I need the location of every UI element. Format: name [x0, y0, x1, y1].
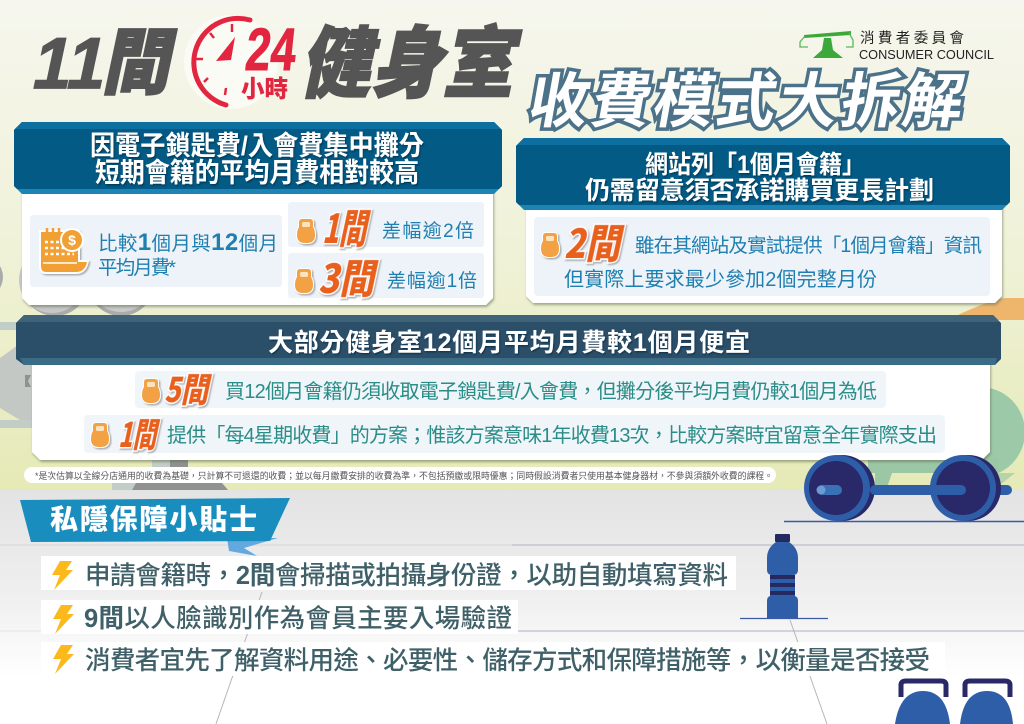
panel heading line 1: 網站列「1個月會籍」	[645, 151, 865, 179]
tip text: 消費者宜先了解資料用途、必要性、儲存方式和保障措施等，以衡量是否接受	[85, 647, 930, 675]
row text: 買12個月會籍仍須收取電子鎖匙費/入會費，但攤分後平均月費仍較1個月為低	[225, 380, 877, 403]
panel heading line 1: 因電子鎖匙費/入會費集中攤分	[90, 131, 424, 161]
comparison text line 2: 平均月費*	[98, 257, 176, 279]
result text: 差幅逾1倍	[387, 270, 477, 292]
icon: kettlebell	[541, 233, 559, 257]
panel: one-month membership	[516, 138, 1010, 303]
icon: kettlebell	[91, 423, 109, 447]
banner title: 私隱保障小貼士	[50, 503, 257, 535]
inner box	[534, 217, 990, 296]
icon: kettlebell	[297, 219, 315, 243]
floor lines	[0, 545, 1024, 724]
icon: kettlebells	[895, 681, 1013, 724]
title part: 24: 24	[243, 16, 300, 83]
count: 1間: 1間	[116, 407, 164, 457]
icon: water bottle	[740, 534, 828, 618]
logo: Consumer Council	[800, 30, 994, 62]
panel body	[526, 205, 1002, 303]
count: 5間: 5間	[162, 362, 216, 412]
panel body	[22, 190, 493, 305]
banner fold	[227, 538, 278, 556]
icon: lightning bolt	[53, 605, 74, 634]
icon: barbell	[784, 455, 1024, 522]
logo scale icon	[800, 31, 853, 58]
title part: 小時: 小時	[241, 76, 288, 103]
logo Chinese name: 消費者委員會	[860, 30, 964, 47]
subtitle: 收費模式大拆解: 收費模式大拆解	[524, 67, 970, 135]
count: 1間: 1間	[319, 197, 376, 255]
title part: 11間: 11間	[27, 24, 183, 104]
clock icon	[184, 15, 278, 109]
panel header	[14, 122, 502, 194]
panel: short-term membership fees	[14, 122, 502, 305]
title part: 健身室: 健身室	[296, 21, 528, 108]
footnote: *是次估算以全線分店通用的收費為基礎，只計算不可退還的收費；並以每月繳費安排的收費為準，不包括預繳或限時優惠；同時假設消費者只使用基本健身器材，不參與須額外收費的課程。	[35, 470, 773, 481]
count: 2間: 2間	[561, 212, 630, 270]
comparison box	[30, 215, 282, 287]
footnote	[24, 467, 776, 483]
logo English name: CONSUMER COUNCIL	[859, 47, 994, 62]
icon: kettlebell	[142, 379, 160, 403]
panel: 12-month plans cheaper	[16, 315, 1001, 460]
panel heading: 大部分健身室12個月平均月費較1個月便宜	[268, 328, 750, 357]
background plant	[868, 387, 1024, 490]
row text: 提供「每4星期收費」的方案；惟該方案意味1年收費13次，比較方案時宜留意全年實際支出	[167, 424, 937, 447]
banner	[20, 498, 290, 542]
row: 1間	[84, 407, 945, 457]
icon: calendar with dollar: $	[68, 232, 76, 248]
section: privacy tips	[20, 498, 945, 676]
row: 5間	[135, 362, 886, 412]
title: 11間 24小時 健身室	[27, 15, 528, 109]
tip row 1	[41, 556, 736, 590]
result box: 1間	[288, 197, 484, 255]
panel body	[32, 360, 990, 460]
background wall	[0, 0, 1024, 490]
body text line 1: 雖在其網站及實試提供「1個月會籍」資訊	[635, 235, 982, 257]
icon: kettlebell	[295, 269, 313, 293]
background gym equipment: grey weights	[0, 246, 228, 490]
result text: 差幅逾2倍	[382, 220, 474, 242]
result box: 3間	[288, 247, 484, 305]
tip row 3	[41, 642, 945, 676]
icon: lightning bolt	[53, 645, 74, 674]
panel header	[516, 138, 1010, 210]
panel header	[16, 315, 1001, 365]
panel heading line 2: 仍需留意須否承諾購買更長計劃	[585, 176, 934, 205]
icon: calendar with dollar	[39, 228, 89, 274]
panel heading line 2: 短期會籍的平均月費相對較高	[95, 158, 419, 188]
body text line 2: 但實際上要求最少參加2個完整月份	[564, 268, 877, 291]
comparison text line 1: 比較1個月與12個月	[98, 229, 278, 256]
tip text: 申請會籍時，2間會掃描或拍攝身份證，以助自動填寫資料	[85, 562, 728, 590]
count: 3間: 3間	[315, 247, 384, 305]
background orange object	[958, 298, 1024, 320]
background floor	[0, 490, 1024, 724]
icon: lightning bolt	[52, 561, 73, 590]
tip text: 9間以人臉識別作為會員主要入場驗證	[84, 605, 512, 633]
tip row 2	[41, 600, 518, 634]
